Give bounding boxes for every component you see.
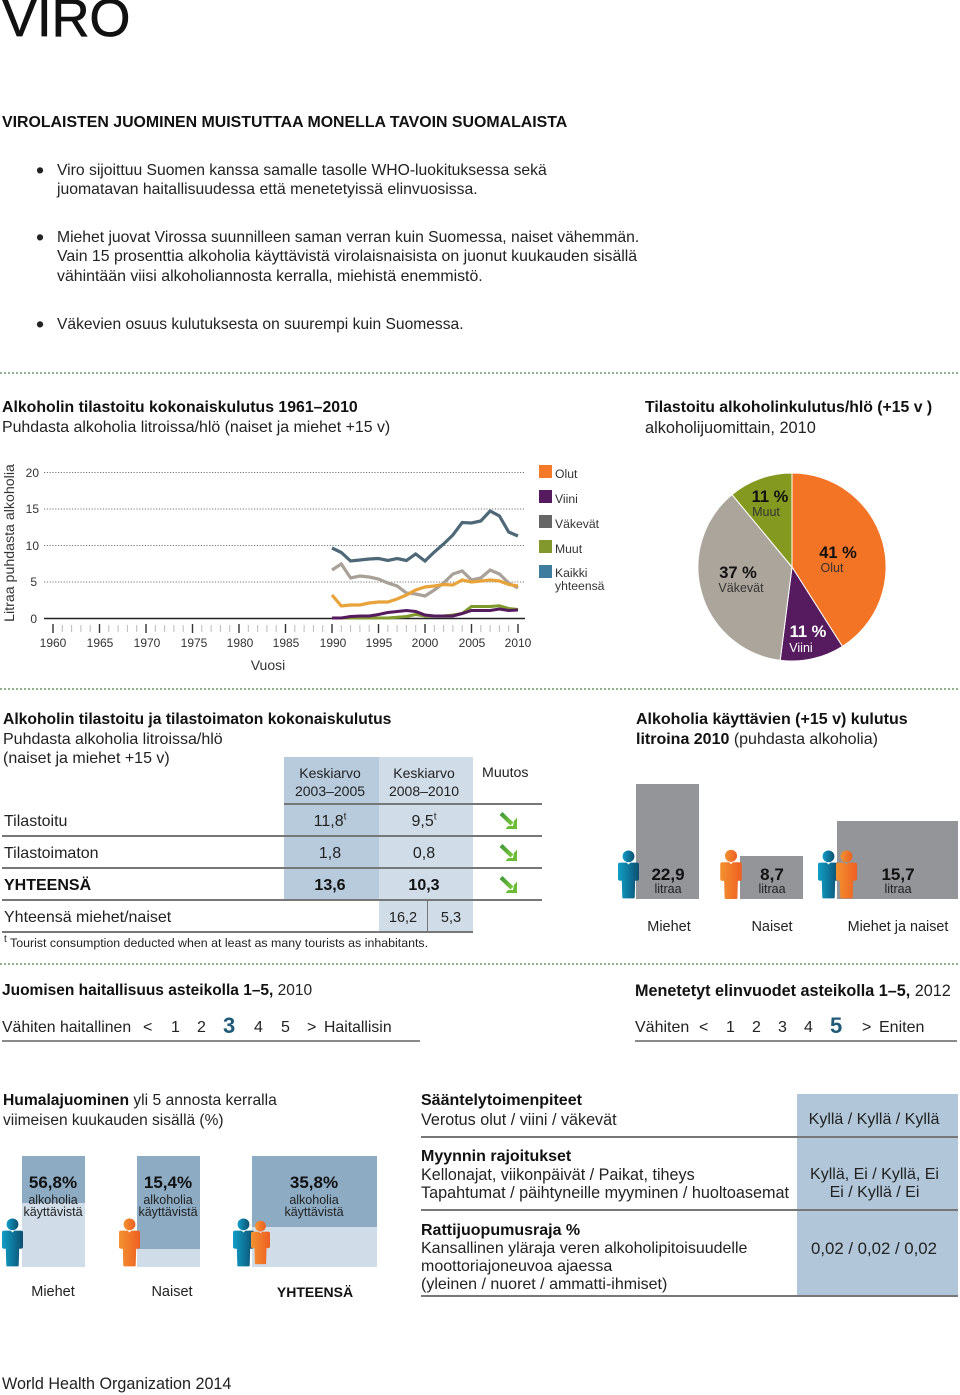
heading: consumption among drinkers	[636, 711, 908, 748]
bar: men: 22,9	[651, 865, 685, 884]
bar: women	[720, 850, 803, 935]
bar: binge men: käyttävistä	[23, 1205, 83, 1219]
table: regulation: Kansallinen yläraja veren alkoholipitoisuudelle	[421, 1240, 747, 1257]
line chart: 20	[26, 466, 39, 480]
pie chart	[698, 474, 886, 660]
icon: arrow down	[500, 876, 517, 893]
icon: arrow down	[500, 812, 517, 829]
heading: total consumption: Puhdasta alkoholia litroissa/hlö (naiset ja miehet +15 v)	[2, 419, 390, 436]
line chart: 1975	[181, 636, 208, 650]
bullet list: juomatavan haitallisuudessa että menetetyissä elinvuosissa.	[57, 181, 478, 198]
table: consumption: YHTEENSÄ	[4, 876, 91, 894]
pie chart: Väkevät	[718, 581, 764, 595]
pie chart: Muut	[752, 505, 780, 519]
table: consumption: 10,3	[408, 876, 440, 894]
scale: harmfulness: <	[143, 1019, 152, 1036]
bar: binge women: Naiset	[151, 1284, 193, 1300]
table: consumption: 5,3	[441, 910, 461, 926]
line chart: 1970	[134, 636, 161, 650]
line chart: 1960	[40, 636, 67, 650]
line chart: 2010	[505, 636, 532, 650]
bar: binge men: Miehet	[31, 1284, 75, 1300]
scale: years of life lost: 2	[752, 1019, 761, 1036]
table: consumption: Yhteensä miehet/naiset	[4, 909, 171, 926]
bar: binge total: YHTEENSÄ	[277, 1284, 353, 1300]
pie chart: 37 %	[719, 564, 757, 582]
line chart: Vuosi	[251, 657, 285, 673]
heading: recorded and unrecorded consumption: Alkoholin tilastoitu ja tilastoimaton kokonaiskulutus	[3, 711, 391, 728]
table: consumption: 0,8	[413, 845, 435, 862]
scale: harmfulness: Haitallisin	[324, 1019, 392, 1036]
bar: binge total: alkoholia	[289, 1193, 339, 1207]
heading: binge drinking: viimeisen kuukauden sisällä (%)	[3, 1112, 224, 1129]
table: regulation: Rattijuopumusraja %	[421, 1222, 580, 1238]
bar: binge total: 35,8%	[290, 1173, 338, 1192]
bar: men and women	[818, 821, 958, 935]
line chart: 5	[30, 575, 37, 589]
line chart: Litraa puhdasta alkoholia	[2, 464, 18, 622]
scale: years of life lost: Menetetyt elinvuodet asteikolla 1–5, 2012	[635, 982, 951, 1000]
heading: binge drinking: Humalajuominen yli 5 annosta kerralla	[3, 1092, 277, 1109]
line chart: 0	[30, 612, 37, 626]
bar: binge men: 56,8%	[29, 1173, 77, 1192]
icon: arrow down	[500, 844, 517, 861]
scale: years of life lost: Vähiten	[635, 1019, 689, 1036]
table: consumption	[2, 757, 542, 950]
scale: harmfulness: 3	[223, 1013, 235, 1038]
pie chart: 41 %	[819, 544, 857, 562]
scale: years of life lost	[635, 982, 957, 1042]
bar: binge total: käyttävistä	[284, 1205, 344, 1219]
legend: Muut	[555, 542, 582, 556]
table: regulation	[421, 1092, 958, 1297]
pie chart: Olut	[821, 561, 844, 575]
bar: women: Naiset	[751, 919, 793, 935]
bar: men	[618, 784, 699, 935]
line chart: 2000	[412, 636, 439, 650]
table: regulation: Myynnin rajoitukset	[421, 1148, 571, 1164]
heading: recorded and unrecorded consumption: Puhdasta alkoholia litroissa/hlö	[3, 731, 223, 748]
table: consumption: 13,6	[314, 876, 346, 894]
bar: binge women: alkoholia	[143, 1193, 193, 1207]
scale: harmfulness: >	[307, 1019, 316, 1036]
heading: total consumption	[2, 399, 390, 436]
scale: harmfulness: 2	[197, 1019, 206, 1036]
table: consumption: Keskiarvo	[299, 765, 361, 781]
legend: Väkevät	[555, 517, 599, 531]
heading: intro: VIROLAISTEN JUOMINEN MUISTUTTAA MONELLA TAVOIN SUOMALAISTA	[2, 114, 567, 131]
heading: recorded and unrecorded consumption: (naiset ja miehet +15 v)	[3, 750, 170, 767]
table: regulation: moottoriajoneuvoa ajaessa	[421, 1258, 612, 1275]
table: consumption: 11,8t	[314, 812, 346, 830]
scale: harmfulness	[2, 982, 420, 1042]
scale: harmfulness: Juomisen haitallisuus asteikolla 1–5, 2010	[2, 982, 312, 999]
table: regulation: 0,02 / 0,02 / 0,02	[811, 1239, 937, 1258]
legend: Kaikki	[555, 566, 588, 580]
line chart: 1985	[273, 636, 300, 650]
pie chart: 11 %	[752, 488, 789, 506]
bullet list: Miehet juovat Virossa suunnilleen saman verran kuin Suomessa, naiset vähemmän.	[57, 229, 639, 246]
scale: years of life lost: 3	[778, 1019, 787, 1036]
bar: binge women	[119, 1156, 200, 1300]
line chart: 1990	[320, 636, 347, 650]
bullet list: •	[36, 224, 44, 250]
table: regulation: Ei / Kyllä / Ei	[830, 1184, 919, 1201]
table: consumption: Muutos	[482, 765, 529, 781]
bar: binge women: käyttävistä	[138, 1205, 198, 1219]
bullet list	[36, 157, 639, 337]
source: World Health Organization 2014	[2, 1375, 231, 1393]
scale: harmfulness: Vähiten haitallinen	[2, 1019, 131, 1036]
bullet list: Viro sijoittuu Suomen kanssa samalle tasolle WHO-luokituksessa sekä	[57, 162, 547, 179]
bar: binge men	[2, 1156, 85, 1300]
bullet list: Vain 15 prosenttia alkoholia käyttävistä virolaisnaisista on juonut kuukauden sisällä	[57, 248, 637, 265]
legend	[539, 465, 604, 592]
bar: men and women: Miehet ja naiset	[848, 919, 948, 935]
line chart: 10	[26, 539, 39, 553]
table: regulation: Verotus olut / viini / väkevät	[421, 1111, 617, 1129]
bar: men and women: litraa	[884, 882, 912, 896]
scale: years of life lost: 4	[804, 1019, 813, 1036]
bullet list: vähintään viisi alkoholiannosta kerralla, miehistä enemmistö.	[57, 268, 483, 285]
line chart: 15	[26, 502, 39, 516]
legend: yhteensä	[555, 578, 604, 592]
heading: consumption per drink type: alkoholijuomittain, 2010	[645, 419, 816, 437]
heading: binge drinking	[3, 1092, 277, 1129]
bar: women: 8,7	[760, 865, 784, 884]
table: consumption: Keskiarvo	[393, 765, 455, 781]
bullet list: Väkevien osuus kulutuksesta on suurempi kuin Suomessa.	[57, 316, 464, 333]
table: regulation: Tapahtumat / päihtyneille myyminen / huoltoasemat	[421, 1184, 789, 1202]
line chart	[2, 464, 532, 673]
line chart: 2005	[459, 636, 486, 650]
table: consumption: 1,8	[319, 845, 341, 862]
scale: years of life lost: <	[699, 1019, 708, 1036]
bar: binge total	[233, 1156, 377, 1300]
heading: consumption per drink type: Tilastoitu alkoholinkulutus/hlö (+15 v )	[645, 399, 932, 416]
table: consumption: 2008–2010	[389, 783, 459, 799]
table: consumption: Tilastoimaton	[4, 845, 99, 862]
heading: consumption per drink type	[645, 399, 932, 437]
legend: Olut	[555, 467, 577, 481]
bullet list: •	[36, 157, 44, 183]
legend: Viini	[555, 492, 578, 506]
line chart: 1980	[227, 636, 254, 650]
table: regulation: (yleinen / nuoret / ammatti-ihmiset)	[421, 1276, 667, 1293]
bar: men and women: 15,7	[881, 865, 915, 884]
table: consumption: 2003–2005	[295, 783, 365, 799]
scale: harmfulness: 5	[281, 1019, 290, 1036]
table: consumption: 16,2	[389, 910, 417, 926]
scale: years of life lost: 5	[830, 1013, 842, 1038]
pie chart: Viini	[789, 641, 813, 655]
bar: binge women: 15,4%	[144, 1173, 192, 1192]
pie chart: 11 %	[790, 623, 827, 641]
bar: men: litraa	[654, 882, 682, 896]
scale: years of life lost: >	[862, 1019, 871, 1036]
table: regulation: Kellonajat, viikonpäivät / Paikat, tiheys	[421, 1166, 695, 1184]
bar: men: Miehet	[647, 919, 691, 935]
table: consumption: 9,5t	[411, 812, 437, 830]
heading: consumption among drinkers: Alkoholia käyttävien (+15 v) kulutus	[636, 711, 908, 728]
table: regulation: Kyllä, Ei / Kyllä, Ei	[810, 1166, 939, 1183]
heading: recorded and unrecorded consumption	[3, 711, 391, 767]
table: regulation: Sääntelytoimenpiteet	[421, 1092, 582, 1109]
line chart: 1965	[87, 636, 114, 650]
line chart: 1995	[366, 636, 393, 650]
scale: harmfulness: 1	[171, 1019, 180, 1036]
table: consumption: Tilastoitu	[4, 813, 67, 830]
bar: binge men: alkoholia	[28, 1193, 78, 1207]
scale: years of life lost: 1	[726, 1019, 735, 1036]
scale: years of life lost: Eniten	[879, 1019, 924, 1036]
bullet list: •	[36, 311, 44, 337]
heading: consumption among drinkers: litroina 2010 (puhdasta alkoholia)	[636, 731, 878, 748]
heading: total consumption: Alkoholin tilastoitu kokonaiskulutus 1961–2010	[2, 399, 358, 416]
table: consumption: t Tourist consumption deducted when at least as many tourists as inhabitants.	[4, 934, 428, 950]
bar: women: litraa	[758, 882, 786, 896]
scale: harmfulness: 4	[254, 1019, 263, 1036]
table: regulation: Kyllä / Kyllä / Kyllä	[809, 1111, 939, 1128]
